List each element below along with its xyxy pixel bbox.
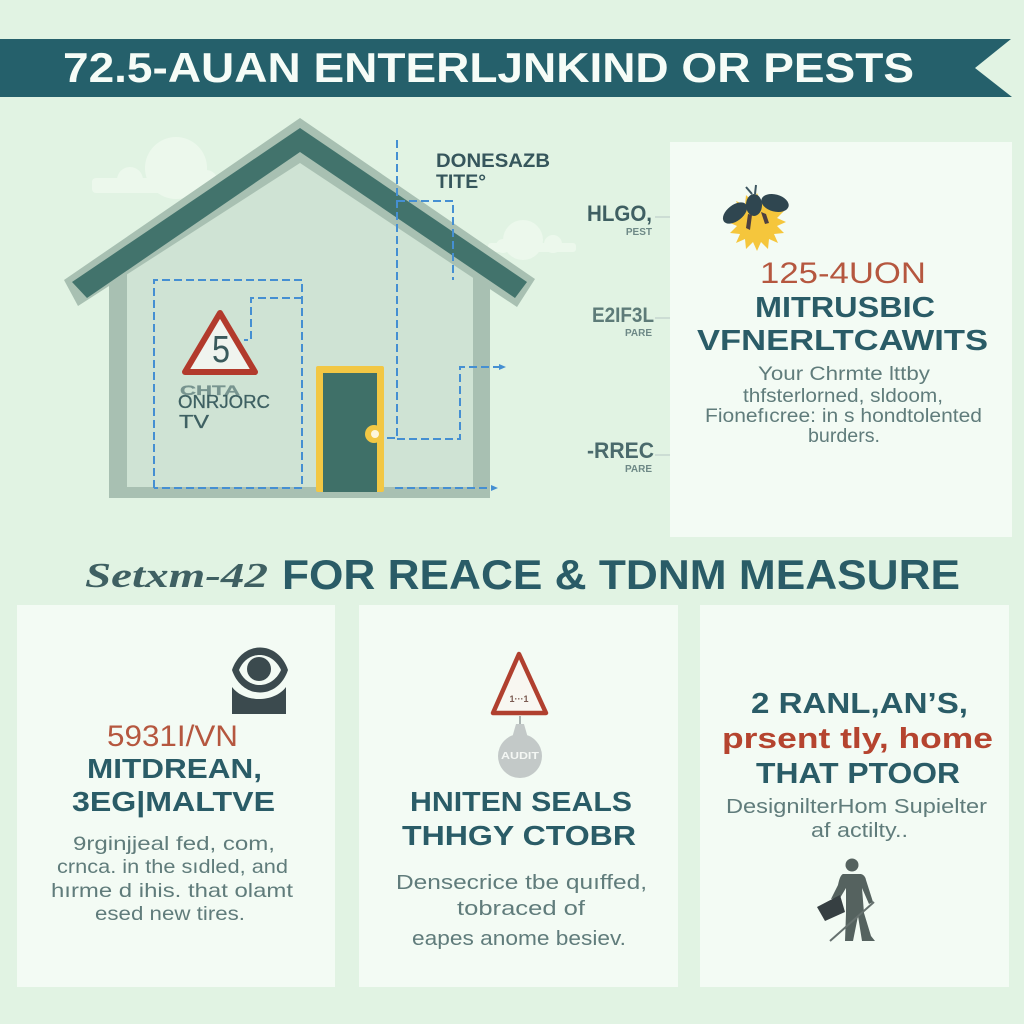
title banner: 72.5-AUAN ENTERLJNKIND OR PESTS <box>63 44 914 91</box>
body text: af actilty.. <box>811 820 908 842</box>
side label: pare 2: PARE <box>625 464 652 475</box>
side label: pare 1: E2IF3L <box>592 304 654 327</box>
side label: pare 1 <box>592 304 682 339</box>
heading: THAT PTOOR <box>756 758 960 790</box>
body text <box>726 796 987 842</box>
body text: hırme d ihis. that olamt <box>51 880 294 902</box>
body text: Fionefıcree: in s hondtolented <box>705 406 982 427</box>
door <box>316 366 384 492</box>
side label: pest <box>587 201 680 238</box>
house label: CHTA <box>180 382 240 398</box>
body text: burders. <box>808 426 880 447</box>
arrow: floor <box>491 485 498 491</box>
panel: professional help <box>700 605 1009 987</box>
body text: Densecrice tbe quıffed, <box>396 872 647 894</box>
heading: VFNERLTCAWITS <box>697 325 988 357</box>
icon: warning sign with bomb <box>493 654 546 778</box>
heading: prsent tly, home <box>722 723 993 755</box>
body text: crnca. in the sıdled, and <box>57 856 288 878</box>
side label: pare 2 <box>587 438 682 475</box>
heading: MITRUSBIC <box>755 292 935 324</box>
house illustration <box>64 118 535 498</box>
heading: 3EG|MALTVE <box>72 786 275 817</box>
body text: eapes anome besiev. <box>412 928 626 950</box>
house label <box>178 382 270 432</box>
icon: warning sign with bomb: AUDIT <box>501 751 539 762</box>
icon: person with case <box>817 858 875 941</box>
heading: HNITEN SEALS <box>410 786 632 817</box>
side label: pest: PEST <box>626 227 652 238</box>
icon: insect on sun <box>719 185 791 251</box>
wiring: dashed left room <box>154 280 302 488</box>
body text: esed new tires. <box>95 903 245 925</box>
wiring: dashed attic line <box>397 201 453 280</box>
side label: pest: HLGO, <box>587 201 652 226</box>
section heading: Setxm-42 <box>85 556 268 595</box>
panel: seals <box>359 605 678 987</box>
side label: pare 1: PARE <box>625 328 652 339</box>
heading <box>722 688 993 790</box>
house label: ONRJORC <box>178 391 270 412</box>
section heading: FOR REACE & TDNM MEASURE <box>282 551 960 598</box>
warning sign <box>185 313 255 372</box>
body text <box>705 364 982 447</box>
roof label: TITE° <box>436 172 486 193</box>
icon: warning sign with bomb: 1···1 <box>509 694 529 704</box>
number heading: 5931I/VN <box>107 720 238 753</box>
roof label: DONESAZB <box>436 151 550 172</box>
icon: eye camera <box>232 648 288 714</box>
wiring: dashed branch to sign <box>244 298 302 340</box>
panel: monitoring <box>17 605 335 987</box>
roof label <box>436 151 550 193</box>
warning sign: 5 <box>212 329 230 371</box>
wiring: dashed vertical line <box>385 140 500 439</box>
heading: 2 RANL,AN’S, <box>751 688 968 720</box>
heading: MITDREAN, <box>87 753 262 784</box>
body text <box>396 872 647 950</box>
cloud right <box>488 220 576 260</box>
heading: THHGY CTOBR <box>402 820 636 851</box>
body text <box>51 833 294 925</box>
body text: tobraced of <box>457 898 586 920</box>
body text: Your Chrmte lttby <box>758 364 931 385</box>
body text: DesignilterHom Supielter <box>726 796 987 818</box>
heading <box>402 786 636 851</box>
panel: vulnerabilities <box>670 142 1012 537</box>
side label: pare 2: -RREC <box>587 438 654 463</box>
wiring: dashed floor line <box>395 487 492 489</box>
cloud left <box>92 137 220 199</box>
heading <box>72 753 275 817</box>
arrow: upper right <box>499 364 506 370</box>
heading <box>697 292 988 357</box>
body text: thfsterlorned, sldoom, <box>743 386 943 407</box>
house label: TV <box>179 412 209 432</box>
body text: 9rginjjeal fed, com, <box>73 833 275 855</box>
title banner <box>0 39 1012 97</box>
number heading: 125-4UON <box>760 257 926 290</box>
